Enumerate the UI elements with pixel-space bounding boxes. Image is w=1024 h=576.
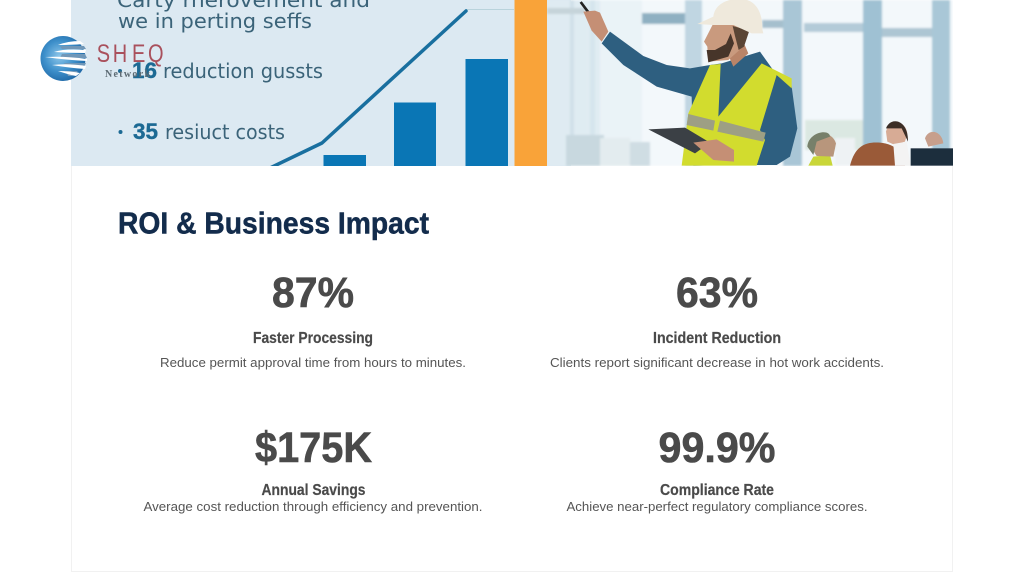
stat: faster processing: Reduce permit approval time from hours to minutes. xyxy=(160,355,466,370)
logo: SHEQ Network xyxy=(40,36,164,81)
tablet xyxy=(648,128,710,153)
stat: annual savings: Average cost reduction through efficiency and prevention. xyxy=(144,499,482,514)
monitor xyxy=(911,148,953,166)
hair and beard xyxy=(707,33,734,62)
panel: ROI card xyxy=(72,160,952,572)
hero image banner xyxy=(71,0,953,168)
stat: compliance rate xyxy=(566,424,868,514)
slide text lines xyxy=(117,0,370,144)
icon: globe xyxy=(40,36,87,81)
stat: incident reduction: 63% xyxy=(676,269,758,317)
stat: annual savings xyxy=(144,424,482,514)
slide text lines: resiuct costs xyxy=(165,120,285,144)
slide text lines: 35 xyxy=(133,119,158,144)
holding hand xyxy=(693,139,734,162)
shirt and arm xyxy=(602,32,797,166)
vest xyxy=(682,63,792,166)
stat: incident reduction xyxy=(550,269,884,370)
slide text lines: we in perting seffs xyxy=(118,9,312,33)
stat: compliance rate: Achieve near-perfect regulatory compliance scores. xyxy=(566,499,868,514)
stat: faster processing: Faster Processing xyxy=(253,330,373,347)
stat: faster processing: 87% xyxy=(272,269,354,317)
slide text lines: reduction gussts xyxy=(163,59,323,83)
stat: incident reduction: Incident Reduction xyxy=(653,330,781,347)
stat: incident reduction: Clients report significant decrease in hot work accidents. xyxy=(550,355,884,370)
stat: annual savings: $175K xyxy=(255,424,372,472)
coworker curly hair xyxy=(850,143,905,166)
photo: safety officer in hard hat and vest xyxy=(581,0,953,166)
marker pen xyxy=(580,1,590,12)
office background xyxy=(547,0,953,166)
stat: annual savings: Annual Savings xyxy=(262,482,366,499)
hard hat xyxy=(697,0,763,33)
wordmark: SHEQ xyxy=(97,40,164,68)
slide text lines: 16 xyxy=(132,58,157,83)
coworker left xyxy=(808,155,833,166)
panel: slide background xyxy=(71,0,571,166)
neck xyxy=(730,44,748,66)
stat: compliance rate: 99.9% xyxy=(658,424,776,472)
coworker right xyxy=(886,122,907,145)
stat: faster processing xyxy=(160,269,466,370)
face xyxy=(704,25,741,62)
bar chart with trend line xyxy=(270,0,547,168)
stat: compliance rate: Compliance Rate xyxy=(660,482,774,499)
coworker far right xyxy=(925,132,943,147)
raised hand xyxy=(583,11,608,42)
heading: ROI & Business Impact xyxy=(118,206,429,240)
tagline: Network xyxy=(105,69,150,80)
